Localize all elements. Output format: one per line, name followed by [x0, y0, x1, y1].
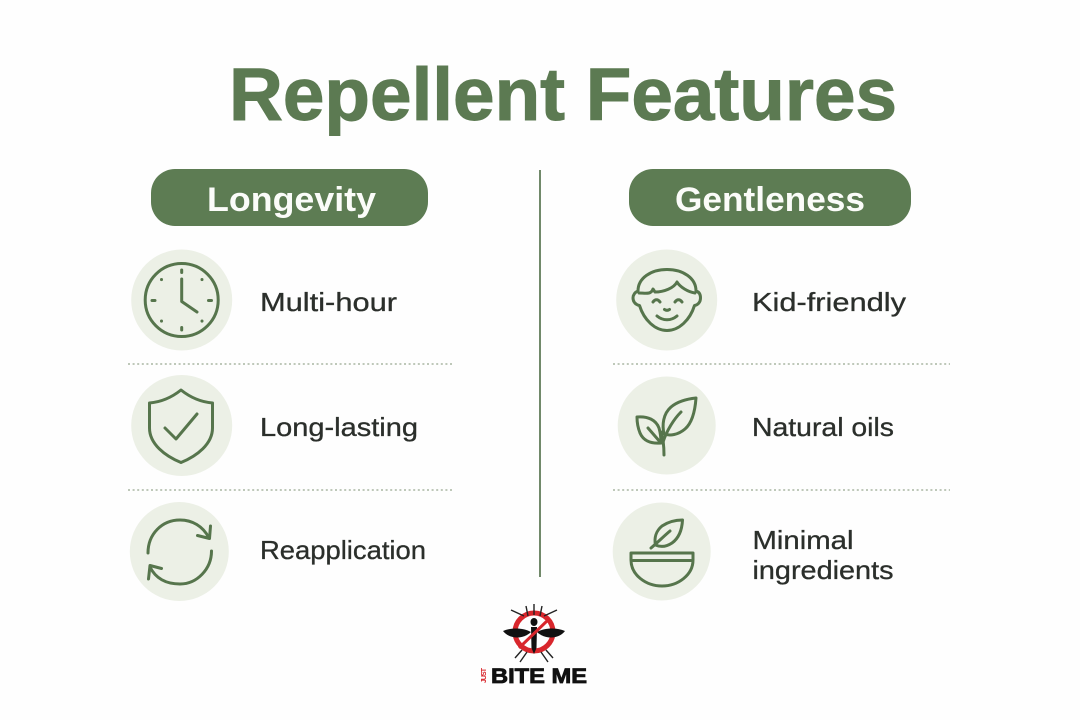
label: minimal ingredients: Minimal — [752, 525, 854, 555]
title: Repellent Features — [229, 53, 897, 136]
panel: gentleness — [613, 169, 950, 600]
icon: mosquito in red ring — [503, 604, 565, 662]
label: long-lasting: Long-lasting — [260, 412, 418, 442]
icon: clock — [131, 250, 232, 350]
icon: reapplication arrows — [130, 502, 229, 601]
label: natural oils: Natural oils — [752, 412, 894, 442]
icon: bowl with leaf — [613, 502, 711, 600]
icon: plant leaves — [618, 376, 716, 474]
icon: shield with check — [131, 375, 232, 476]
logo wordmark: JUST — [481, 667, 488, 683]
icon: child face — [616, 250, 717, 350]
label: minimal ingredients — [752, 525, 894, 585]
logo: just bite me — [481, 604, 587, 688]
label: reapplication: Reapplication — [260, 535, 426, 565]
label: kid-friendly: Kid-friendly — [752, 287, 906, 317]
panel: longevity — [128, 169, 452, 601]
heading: gentleness: Gentleness — [675, 181, 865, 219]
center divider — [539, 170, 541, 577]
logo wordmark: BITE ME — [491, 665, 587, 688]
heading: gentleness — [629, 169, 911, 226]
heading: longevity: Longevity — [207, 181, 376, 219]
heading: longevity — [151, 169, 428, 226]
label: multi-hour: Multi-hour — [260, 287, 397, 317]
label: minimal ingredients: ingredients — [752, 555, 894, 585]
